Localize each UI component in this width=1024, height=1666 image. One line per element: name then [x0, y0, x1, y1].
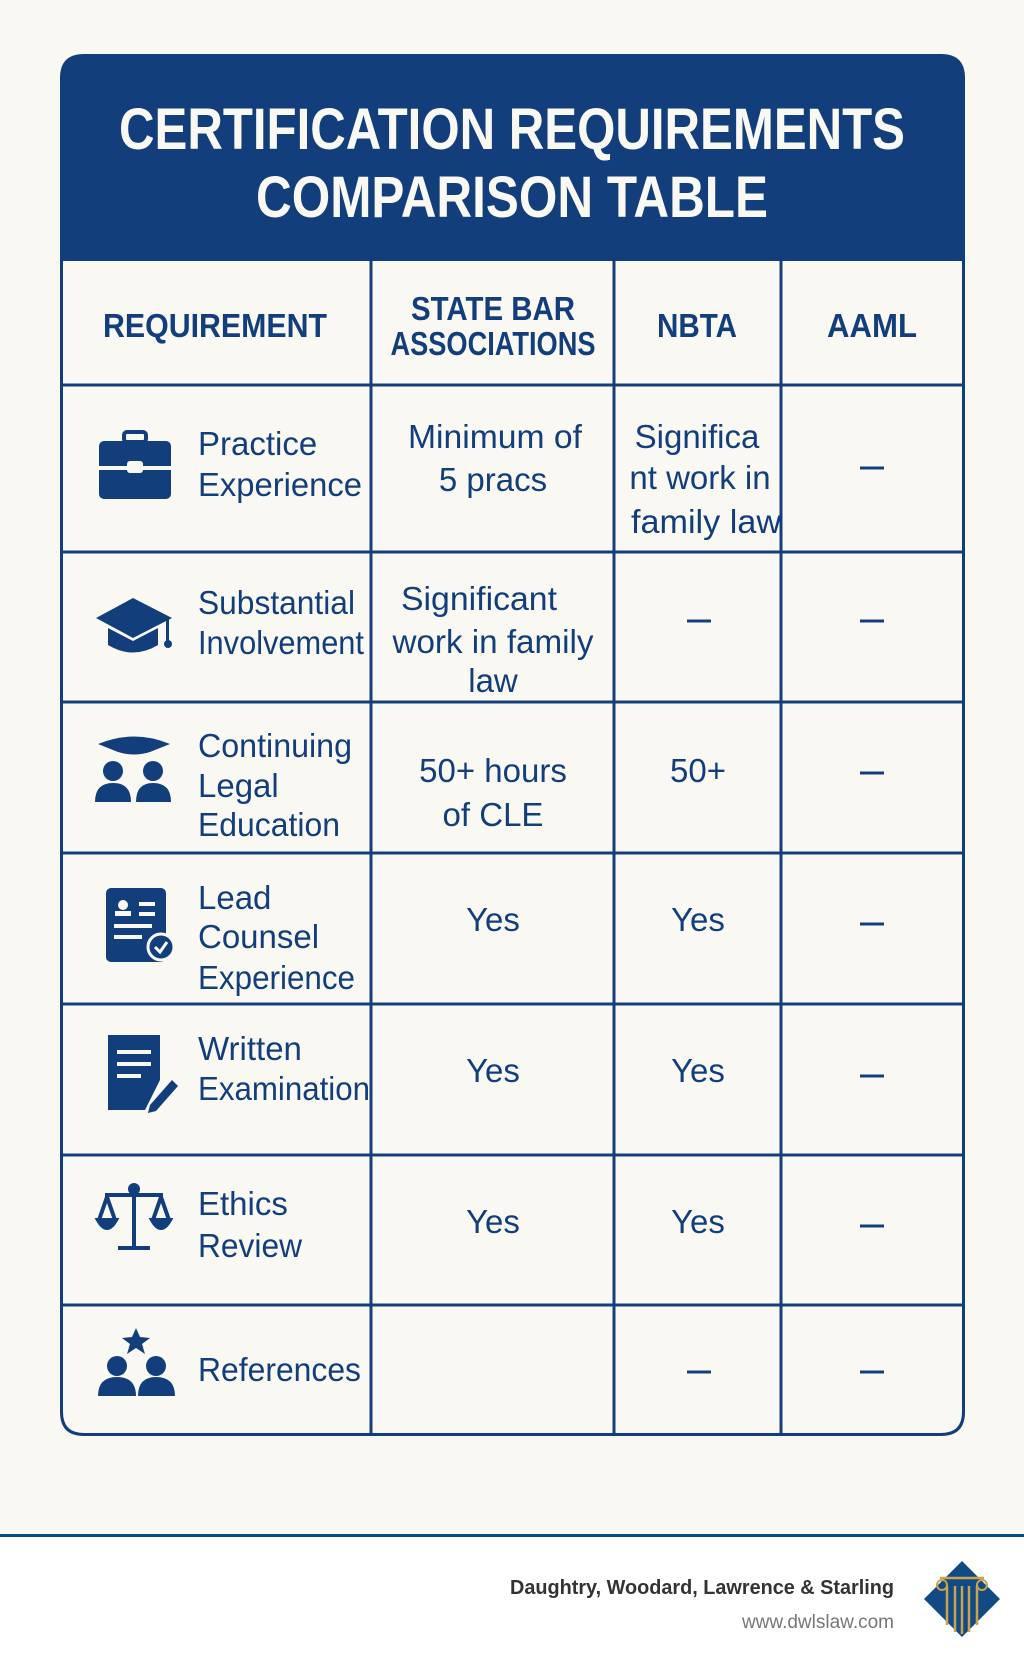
row text: Education	[198, 806, 340, 843]
row text: Substantial	[198, 584, 355, 621]
footer company name	[510, 1577, 894, 1633]
row text: Practice	[198, 425, 317, 462]
row text: Minimum of	[408, 418, 583, 455]
table card	[60, 54, 965, 1436]
row text: work in family	[391, 623, 594, 660]
icon: written exam	[108, 1035, 178, 1113]
footer divider	[0, 1534, 1024, 1537]
row text: law	[468, 662, 518, 699]
row text: Continuing	[198, 727, 352, 764]
row text: of CLE	[443, 796, 543, 833]
icon: graduation cap	[96, 598, 172, 652]
row text: Lead	[198, 879, 271, 916]
row text: 50+ hours	[419, 752, 567, 789]
footer company name: Daughtry, Woodard, Lawrence & Starling	[510, 1577, 894, 1599]
title	[119, 97, 905, 230]
row text: Yes	[466, 1052, 520, 1089]
row text: Yes	[671, 1203, 725, 1240]
row text: Significa	[635, 418, 760, 455]
icon: briefcase	[99, 432, 171, 499]
title: CERTIFICATION REQUIREMENTS	[119, 97, 905, 162]
row text: 5 pracs	[439, 461, 547, 498]
column headers	[103, 290, 917, 362]
column headers: STATE BAR	[411, 290, 575, 327]
row text: Review	[198, 1227, 302, 1264]
row text: Legal	[198, 767, 279, 804]
row text: Significant	[401, 580, 557, 617]
icon: scales	[98, 1185, 170, 1248]
row text: Experience	[198, 466, 362, 503]
icon: lead counsel document	[106, 888, 174, 962]
dashes	[687, 468, 884, 1372]
row text: Counsel	[198, 918, 319, 955]
column headers: AAML	[827, 307, 917, 344]
footer company name: www.dwlslaw.com	[741, 1612, 894, 1633]
row text: Yes	[466, 1203, 520, 1240]
row text: family law	[631, 503, 781, 540]
column headers: ASSOCIATIONS	[390, 325, 596, 362]
row text	[198, 418, 781, 1388]
icon: references	[98, 1328, 175, 1396]
icon: CLE people with cap	[95, 736, 171, 802]
title: COMPARISON TABLE	[256, 165, 768, 230]
row text: Yes	[466, 901, 520, 938]
logo	[924, 1561, 1000, 1637]
column headers: REQUIREMENT	[103, 307, 327, 344]
row text: Examination	[198, 1070, 370, 1107]
column headers: NBTA	[657, 307, 737, 344]
row text: Experience	[198, 959, 355, 996]
row text: nt work in	[629, 459, 771, 496]
row text: References	[198, 1351, 361, 1388]
row text: Yes	[671, 1052, 725, 1089]
row text: Involvement	[198, 624, 364, 661]
row text: Yes	[671, 901, 725, 938]
row text: 50+	[670, 752, 726, 789]
row text: Ethics	[198, 1185, 288, 1222]
row text: Written	[198, 1030, 302, 1067]
